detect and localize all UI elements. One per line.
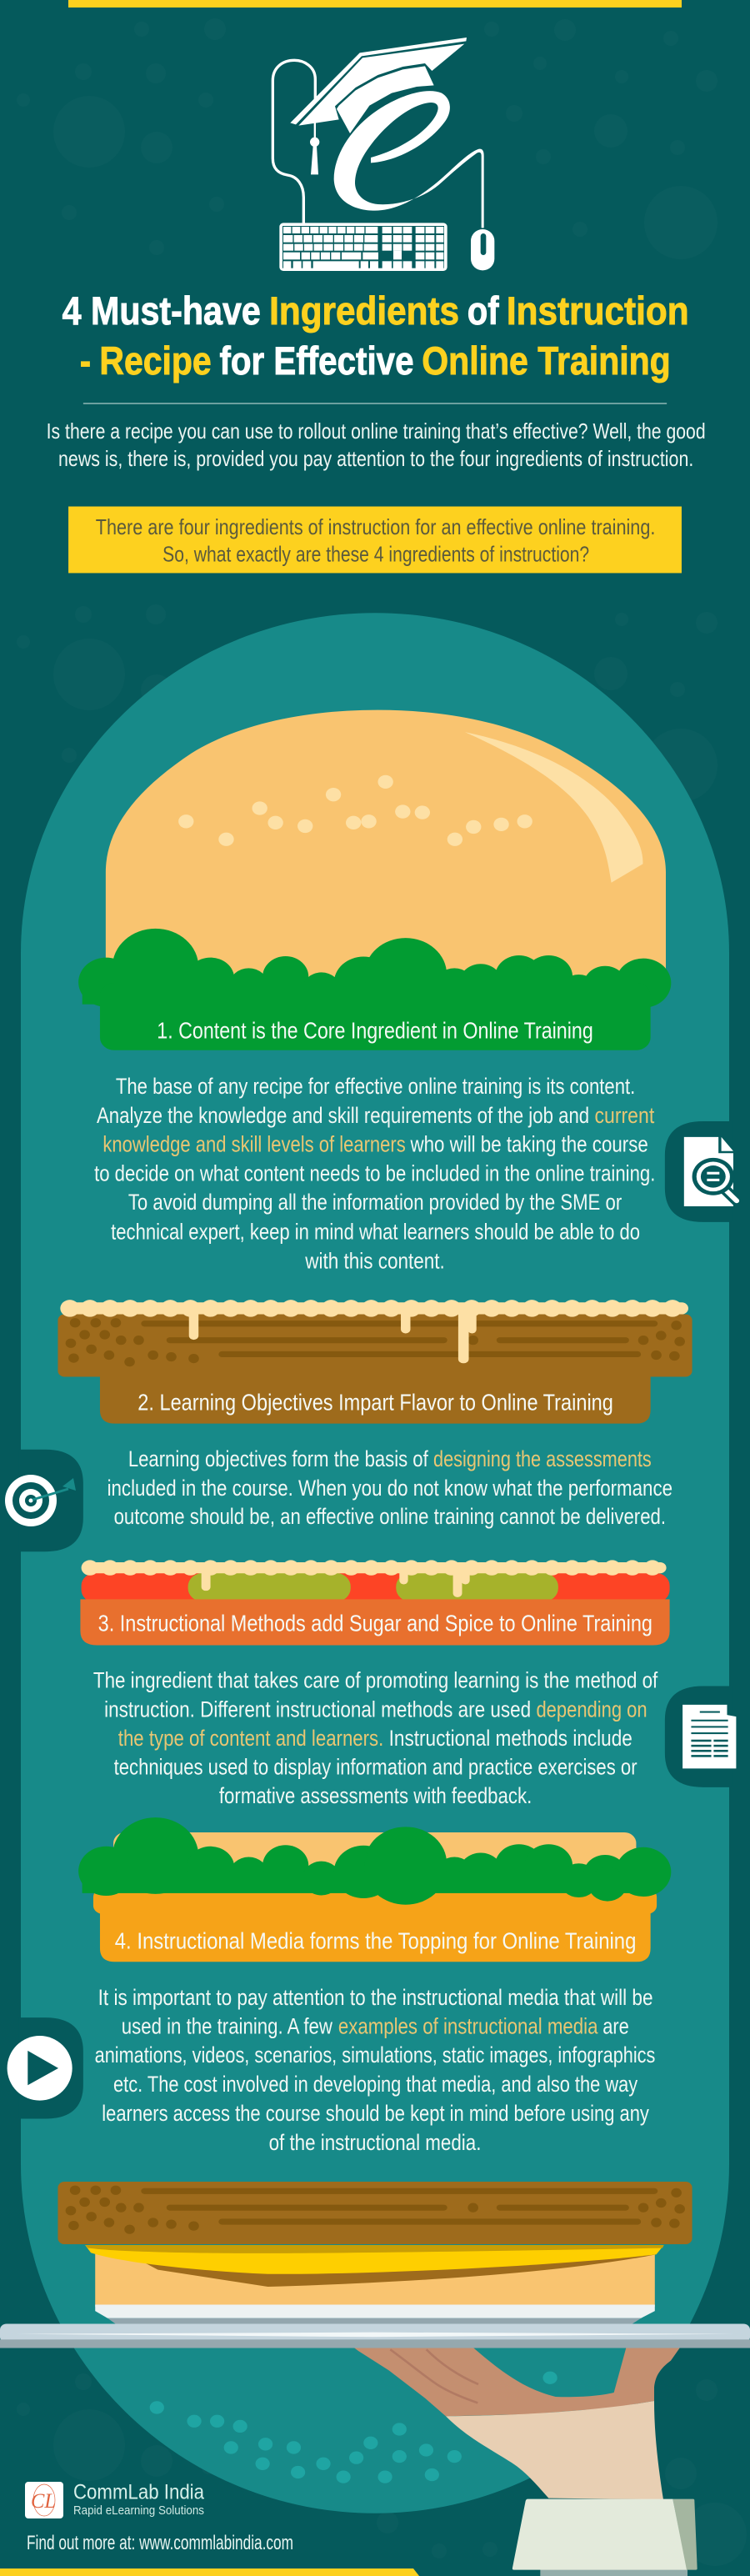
serving tray xyxy=(0,2323,750,2348)
paragraph 3 xyxy=(93,1668,658,1809)
cheese slice xyxy=(85,2245,664,2274)
section 1 xyxy=(78,710,737,1245)
bottom yellow bar xyxy=(0,2568,419,2576)
paragraph 3: instruction. Different instructional methods are used xyxy=(104,1697,531,1722)
footer logo tile xyxy=(25,2482,63,2518)
tomato and pickle layer xyxy=(82,1568,670,1602)
shirt cuff xyxy=(512,2499,698,2576)
teal dots xyxy=(150,2372,558,2483)
yellow callout xyxy=(68,507,682,573)
icon: document xyxy=(665,1686,736,1787)
header text region xyxy=(47,289,706,573)
paragraph 3: formative assessments with feedback. xyxy=(219,1784,532,1809)
hand xyxy=(352,2347,681,2416)
icon tab: target background xyxy=(19,1450,83,1551)
paragraph 3: the type of content and learners. xyxy=(118,1726,383,1751)
icon: document search xyxy=(665,1121,737,1222)
paragraph 4: of the instructional media. xyxy=(269,2130,481,2155)
hand holding tray xyxy=(352,2347,698,2576)
patty under cheese xyxy=(143,2249,657,2287)
paragraph 2 xyxy=(108,1447,672,1530)
icon: target and arrow xyxy=(5,1475,76,1526)
main teal panel xyxy=(21,613,729,2513)
title line 1: Ingredients xyxy=(269,289,459,333)
heading 1: 1. Content is the Core Ingredient in Online Training xyxy=(157,1018,593,1044)
paragraph 2: Learning objectives form the basis of xyxy=(128,1447,429,1472)
icon: play button xyxy=(8,2017,83,2119)
lettuce xyxy=(78,929,671,1011)
bread with frosting xyxy=(58,1308,692,1377)
paragraph 4: are xyxy=(602,2014,629,2039)
section 4 xyxy=(8,1909,692,2483)
graduation cap xyxy=(290,38,467,174)
top bun xyxy=(106,710,666,983)
keyboard xyxy=(279,223,448,271)
heading 3 xyxy=(80,1599,670,1645)
title line 2: for Effective xyxy=(219,340,414,383)
bun section 4 xyxy=(113,1832,636,1905)
title line 1: 4 Must-have xyxy=(62,289,261,333)
paragraph 1: current xyxy=(594,1104,654,1129)
footer brand name: CommLab India xyxy=(73,2481,204,2504)
orange band section 4 xyxy=(93,1888,657,1914)
paragraph 4 xyxy=(95,1985,655,2155)
paragraph 3: depending on xyxy=(536,1697,648,1722)
paragraph 4: examples of instructional media xyxy=(338,2014,598,2039)
bottom bread slice xyxy=(58,2182,692,2244)
forearm xyxy=(446,2401,663,2499)
letter e swoosh with cable xyxy=(334,91,484,228)
title line 2: - xyxy=(80,340,91,383)
bottom bun and plate xyxy=(95,2245,655,2325)
top yellow bar xyxy=(68,0,682,8)
title line 1: of xyxy=(468,289,499,333)
lettuce section 4 xyxy=(78,1817,671,1905)
paragraph 1: who will be taking the course xyxy=(410,1132,648,1157)
mouse xyxy=(471,229,494,270)
heading 1 xyxy=(100,983,651,1050)
paragraph 1 xyxy=(94,1074,655,1245)
title line 2: Recipe xyxy=(99,340,212,383)
heading 2 xyxy=(100,1374,651,1424)
heading 4 xyxy=(100,1909,651,1962)
footer link: Find out more at: www.commlabindia.com xyxy=(27,2532,293,2554)
footer tagline: Rapid eLearning Solutions xyxy=(73,2504,204,2518)
logo: graduation cap, e, keyboard and mouse xyxy=(272,38,494,271)
heading 2: 2. Learning Objectives Impart Flavor to Online Training xyxy=(138,1390,613,1416)
paragraph 4: used in the training. A few xyxy=(122,2014,332,2039)
paragraph 2: designing the assessments xyxy=(433,1447,652,1472)
paragraph 3: Instructional methods include xyxy=(389,1726,632,1751)
paragraph 1: knowledge and skill levels of learners xyxy=(102,1132,406,1157)
finger creases xyxy=(390,2349,478,2403)
left cable xyxy=(272,60,315,223)
intro text xyxy=(47,419,706,471)
section 2 and 3 xyxy=(19,1249,736,1914)
paragraph 1 last line: with this content. xyxy=(304,1249,445,1274)
footer logo tile: CL xyxy=(31,2490,56,2513)
